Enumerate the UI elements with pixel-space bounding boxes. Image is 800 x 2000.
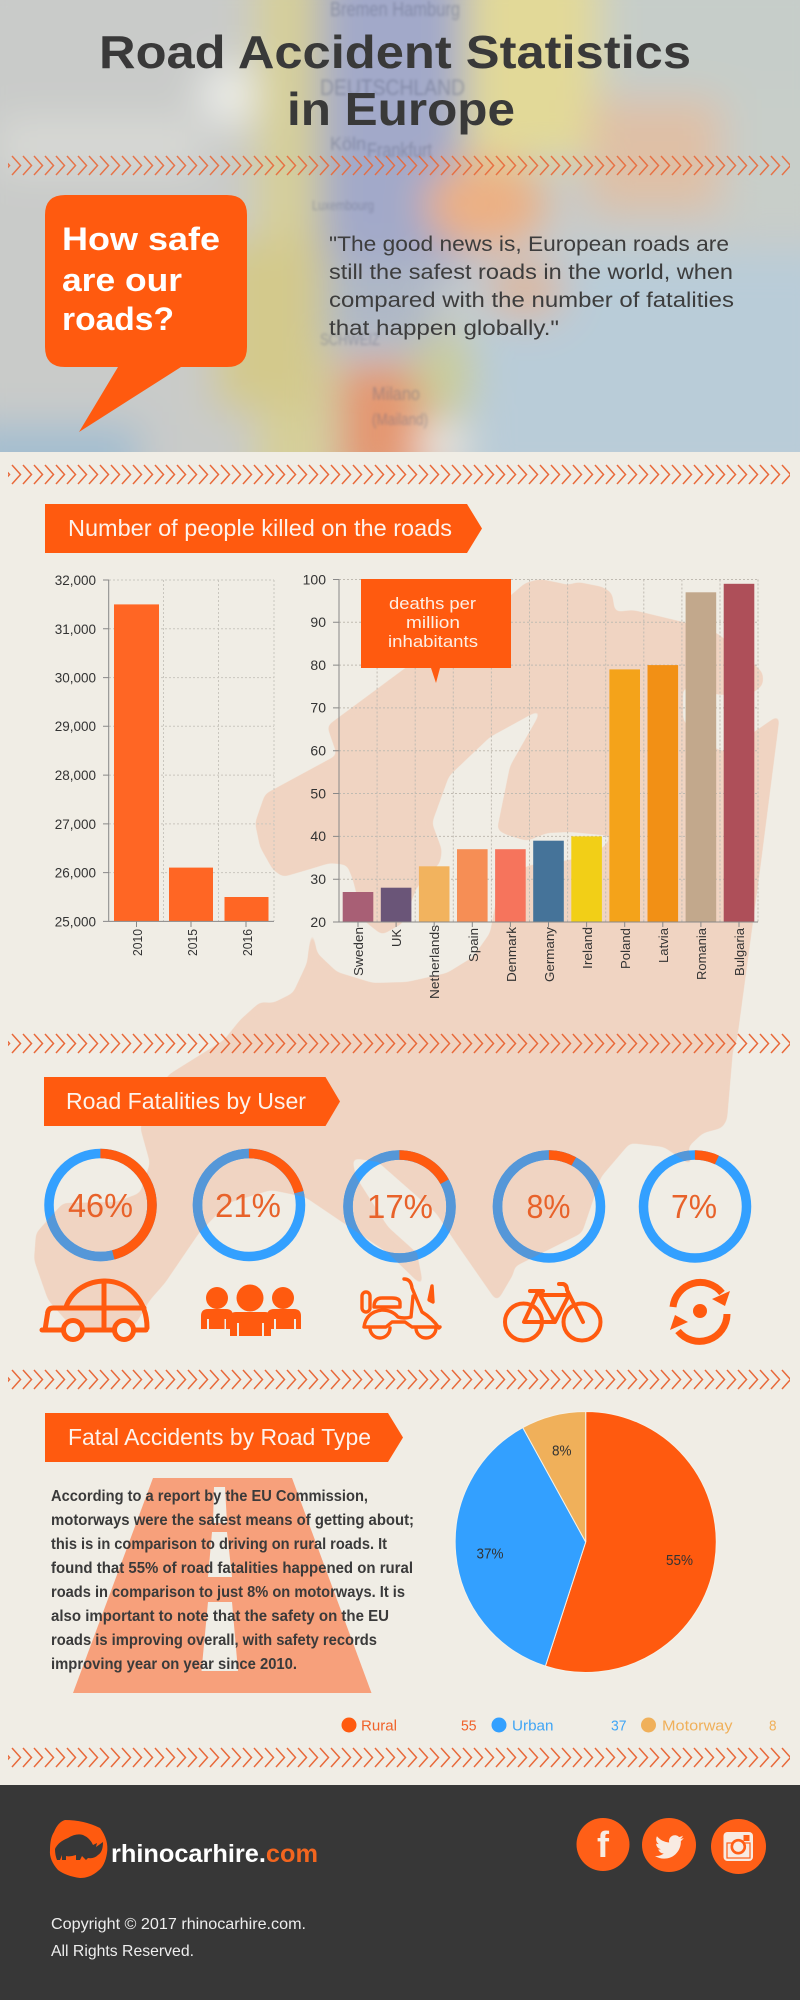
bar chart: deaths per million inhabitants by country: 50	[310, 786, 326, 802]
speech bubble callout: roads?	[62, 301, 174, 337]
bar chart: total deaths by year: 25,000	[55, 914, 96, 930]
body text: fatal accidents: improving year on year since 2010.	[51, 1656, 297, 1673]
quote text: that happen globally."	[329, 317, 559, 340]
bar chart: deaths per million inhabitants by country: 30	[310, 871, 326, 887]
ring: 46%: 46%	[68, 1187, 133, 1224]
body text: fatal accidents: roads is improving overall, with safety records	[51, 1632, 377, 1649]
hero: blurred map background	[0, 0, 800, 500]
chevron divider 1	[8, 155, 790, 176]
bar chart: deaths per million inhabitants by country: Denmark	[504, 926, 519, 982]
chevron divider 3	[8, 1033, 790, 1054]
ring: 21%	[198, 1154, 300, 1256]
body text: fatal accidents: roads in comparison to just 8% on motorways. It is	[51, 1584, 405, 1601]
pie legend	[342, 1718, 776, 1734]
bar chart: deaths per million inhabitants by country: 60	[310, 742, 326, 758]
bar chart: total deaths by year: 29,000	[55, 719, 96, 734]
bar chart: total deaths by year: 2016	[240, 929, 255, 956]
bar chart: deaths per million inhabitants by country: 70	[310, 700, 326, 716]
ring: 17%	[348, 1155, 451, 1258]
bar chart: deaths per million inhabitants by country: 100	[303, 572, 326, 588]
body text: fatal accidents: motorways were the safest means of getting about;	[51, 1512, 414, 1529]
icon: facebook	[576, 1818, 630, 1871]
heading: Fatal Accidents by Road Type: Fatal Accidents by Road Type	[68, 1424, 371, 1450]
body text: fatal accidents	[51, 1488, 414, 1673]
heading: Road Fatalities by User: Road Fatalities by User	[66, 1088, 306, 1114]
bar chart: deaths per million inhabitants by country: Spain	[466, 928, 481, 962]
icon: people	[201, 1284, 301, 1336]
pie legend: 55	[461, 1718, 476, 1734]
bar chart: deaths per million inhabitants by country: 90	[310, 614, 326, 630]
bar chart: deaths per million inhabitants by country: 40	[310, 828, 326, 844]
ring: 46%	[49, 1154, 152, 1256]
callout: deaths per million inhabitants: deaths per	[389, 594, 476, 613]
pie legend: Rural	[361, 1718, 397, 1734]
pie legend: Urban	[512, 1718, 554, 1734]
bar chart: deaths per million inhabitants by country: 20	[310, 914, 326, 930]
pie chart	[455, 1411, 716, 1672]
footer panel	[0, 1785, 800, 2000]
icon: instagram	[711, 1819, 766, 1874]
callout: deaths per million inhabitants: million	[406, 613, 460, 632]
bar chart: deaths per million inhabitants by country: Romania	[694, 927, 709, 980]
body text: fatal accidents: also important to note that the safety on the EU	[51, 1608, 389, 1625]
bar chart: total deaths by year: 27,000	[55, 817, 96, 832]
bar chart: total deaths by year: 2010	[130, 929, 145, 956]
icon: car	[42, 1281, 147, 1340]
bar chart: total deaths by year: 28,000	[55, 768, 96, 783]
bar chart: deaths per million inhabitants by country: Latvia	[656, 927, 671, 963]
bar chart: deaths per million inhabitants by country: UK	[389, 929, 404, 947]
copyright text: Copyright © 2017 rhinocarhire.com.	[51, 1916, 306, 1933]
pie chart: 55%	[666, 1553, 693, 1569]
chevron divider 4	[8, 1369, 790, 1390]
body text: fatal accidents: this is in comparison to driving on rural roads. It	[51, 1536, 388, 1553]
quote text: still the safest roads in the world, when	[329, 261, 733, 284]
speech bubble callout: are our	[62, 262, 182, 298]
bar chart: total deaths by year: 31,000	[55, 622, 96, 637]
bar chart: total deaths by year: 32,000	[55, 573, 96, 588]
bar chart: deaths per million inhabitants by country: Netherlands	[427, 924, 442, 999]
copyright text: All Rights Reserved.	[51, 1943, 194, 1960]
chevron divider 5	[8, 1747, 790, 1768]
ring: 8%	[498, 1155, 600, 1258]
callout: deaths per million inhabitants	[361, 579, 511, 683]
hero: blurred map background: (Mailand)	[372, 410, 428, 429]
bar chart: deaths per million inhabitants by country: Ireland	[580, 927, 595, 969]
icon: scooter	[362, 1279, 440, 1338]
title: Road Accident Statistics	[99, 26, 691, 78]
bar chart: deaths per million inhabitants by country: 80	[310, 657, 326, 673]
callout: deaths per million inhabitants: inhabitants	[388, 632, 478, 651]
icon: facebook: f	[597, 1824, 610, 1865]
icon: twitter	[642, 1818, 696, 1872]
quote text: compared with the number of fatalities	[329, 289, 734, 312]
bar chart: deaths per million inhabitants by country: Poland	[618, 928, 633, 969]
speech bubble callout: How safe	[62, 221, 220, 257]
bar chart: deaths per million inhabitants by country: Bulgaria	[732, 927, 747, 976]
ring: 21%: 21%	[215, 1187, 281, 1224]
speech bubble callout	[45, 195, 247, 432]
bar chart: total deaths by year	[55, 573, 274, 956]
pie chart: 37%	[476, 1546, 504, 1562]
hero: blurred map background: Luxembourg	[312, 197, 374, 213]
logo: rhino badge	[50, 1820, 107, 1878]
pie legend: 8	[769, 1718, 776, 1734]
pie legend: 37	[611, 1718, 626, 1734]
body text: fatal accidents: found that 55% of road fatalities happened on rural	[51, 1560, 413, 1577]
title: in Europe	[287, 83, 515, 135]
bar chart: total deaths by year: 26,000	[55, 866, 96, 880]
heading: Number of people killed on the roads: Number of people killed on the roads	[68, 515, 452, 541]
ring: 7%	[644, 1155, 746, 1258]
chevron divider 2	[8, 464, 790, 485]
background Europe map silhouette	[34, 579, 780, 1332]
bar chart: deaths per million inhabitants by country	[303, 572, 758, 999]
hero: blurred map background: Frankfurt	[367, 140, 432, 162]
icon: bicycle	[505, 1284, 600, 1340]
quote text: "The good news is, European roads are	[329, 233, 729, 256]
ring: 17%: 17%	[367, 1188, 433, 1225]
icon: recycle arrows	[670, 1282, 730, 1341]
heading: Fatal Accidents by Road Type	[45, 1413, 403, 1462]
heading: Road Fatalities by User	[44, 1077, 340, 1126]
ring: 7%: 7%	[671, 1188, 717, 1225]
hero: blurred map background: Köln	[330, 134, 366, 154]
hero: blurred map background: Milano	[372, 384, 420, 404]
bar chart: deaths per million inhabitants by country: Sweden	[351, 927, 366, 976]
hero: blurred map background: DEUTSCHLAND	[320, 75, 465, 100]
bar chart: total deaths by year: 2015	[185, 929, 200, 956]
quote text	[329, 233, 734, 340]
hero: blurred map background: SCHWEIZ	[320, 330, 380, 349]
logo wordmark: rhinocarhire.com	[111, 1840, 318, 1868]
heading: Number of people killed on the roads	[45, 504, 482, 553]
pie chart: 8%	[552, 1444, 572, 1460]
title	[99, 26, 691, 135]
road illustration	[73, 1478, 372, 1693]
ring: 8%: 8%	[526, 1188, 570, 1225]
body text: fatal accidents: According to a report by the EU Commission,	[51, 1488, 368, 1505]
bar chart: total deaths by year: 30,000	[55, 670, 96, 686]
copyright text	[51, 1916, 306, 1960]
bar chart: deaths per million inhabitants by country: Germany	[542, 926, 557, 982]
pie legend: Motorway	[662, 1718, 733, 1734]
